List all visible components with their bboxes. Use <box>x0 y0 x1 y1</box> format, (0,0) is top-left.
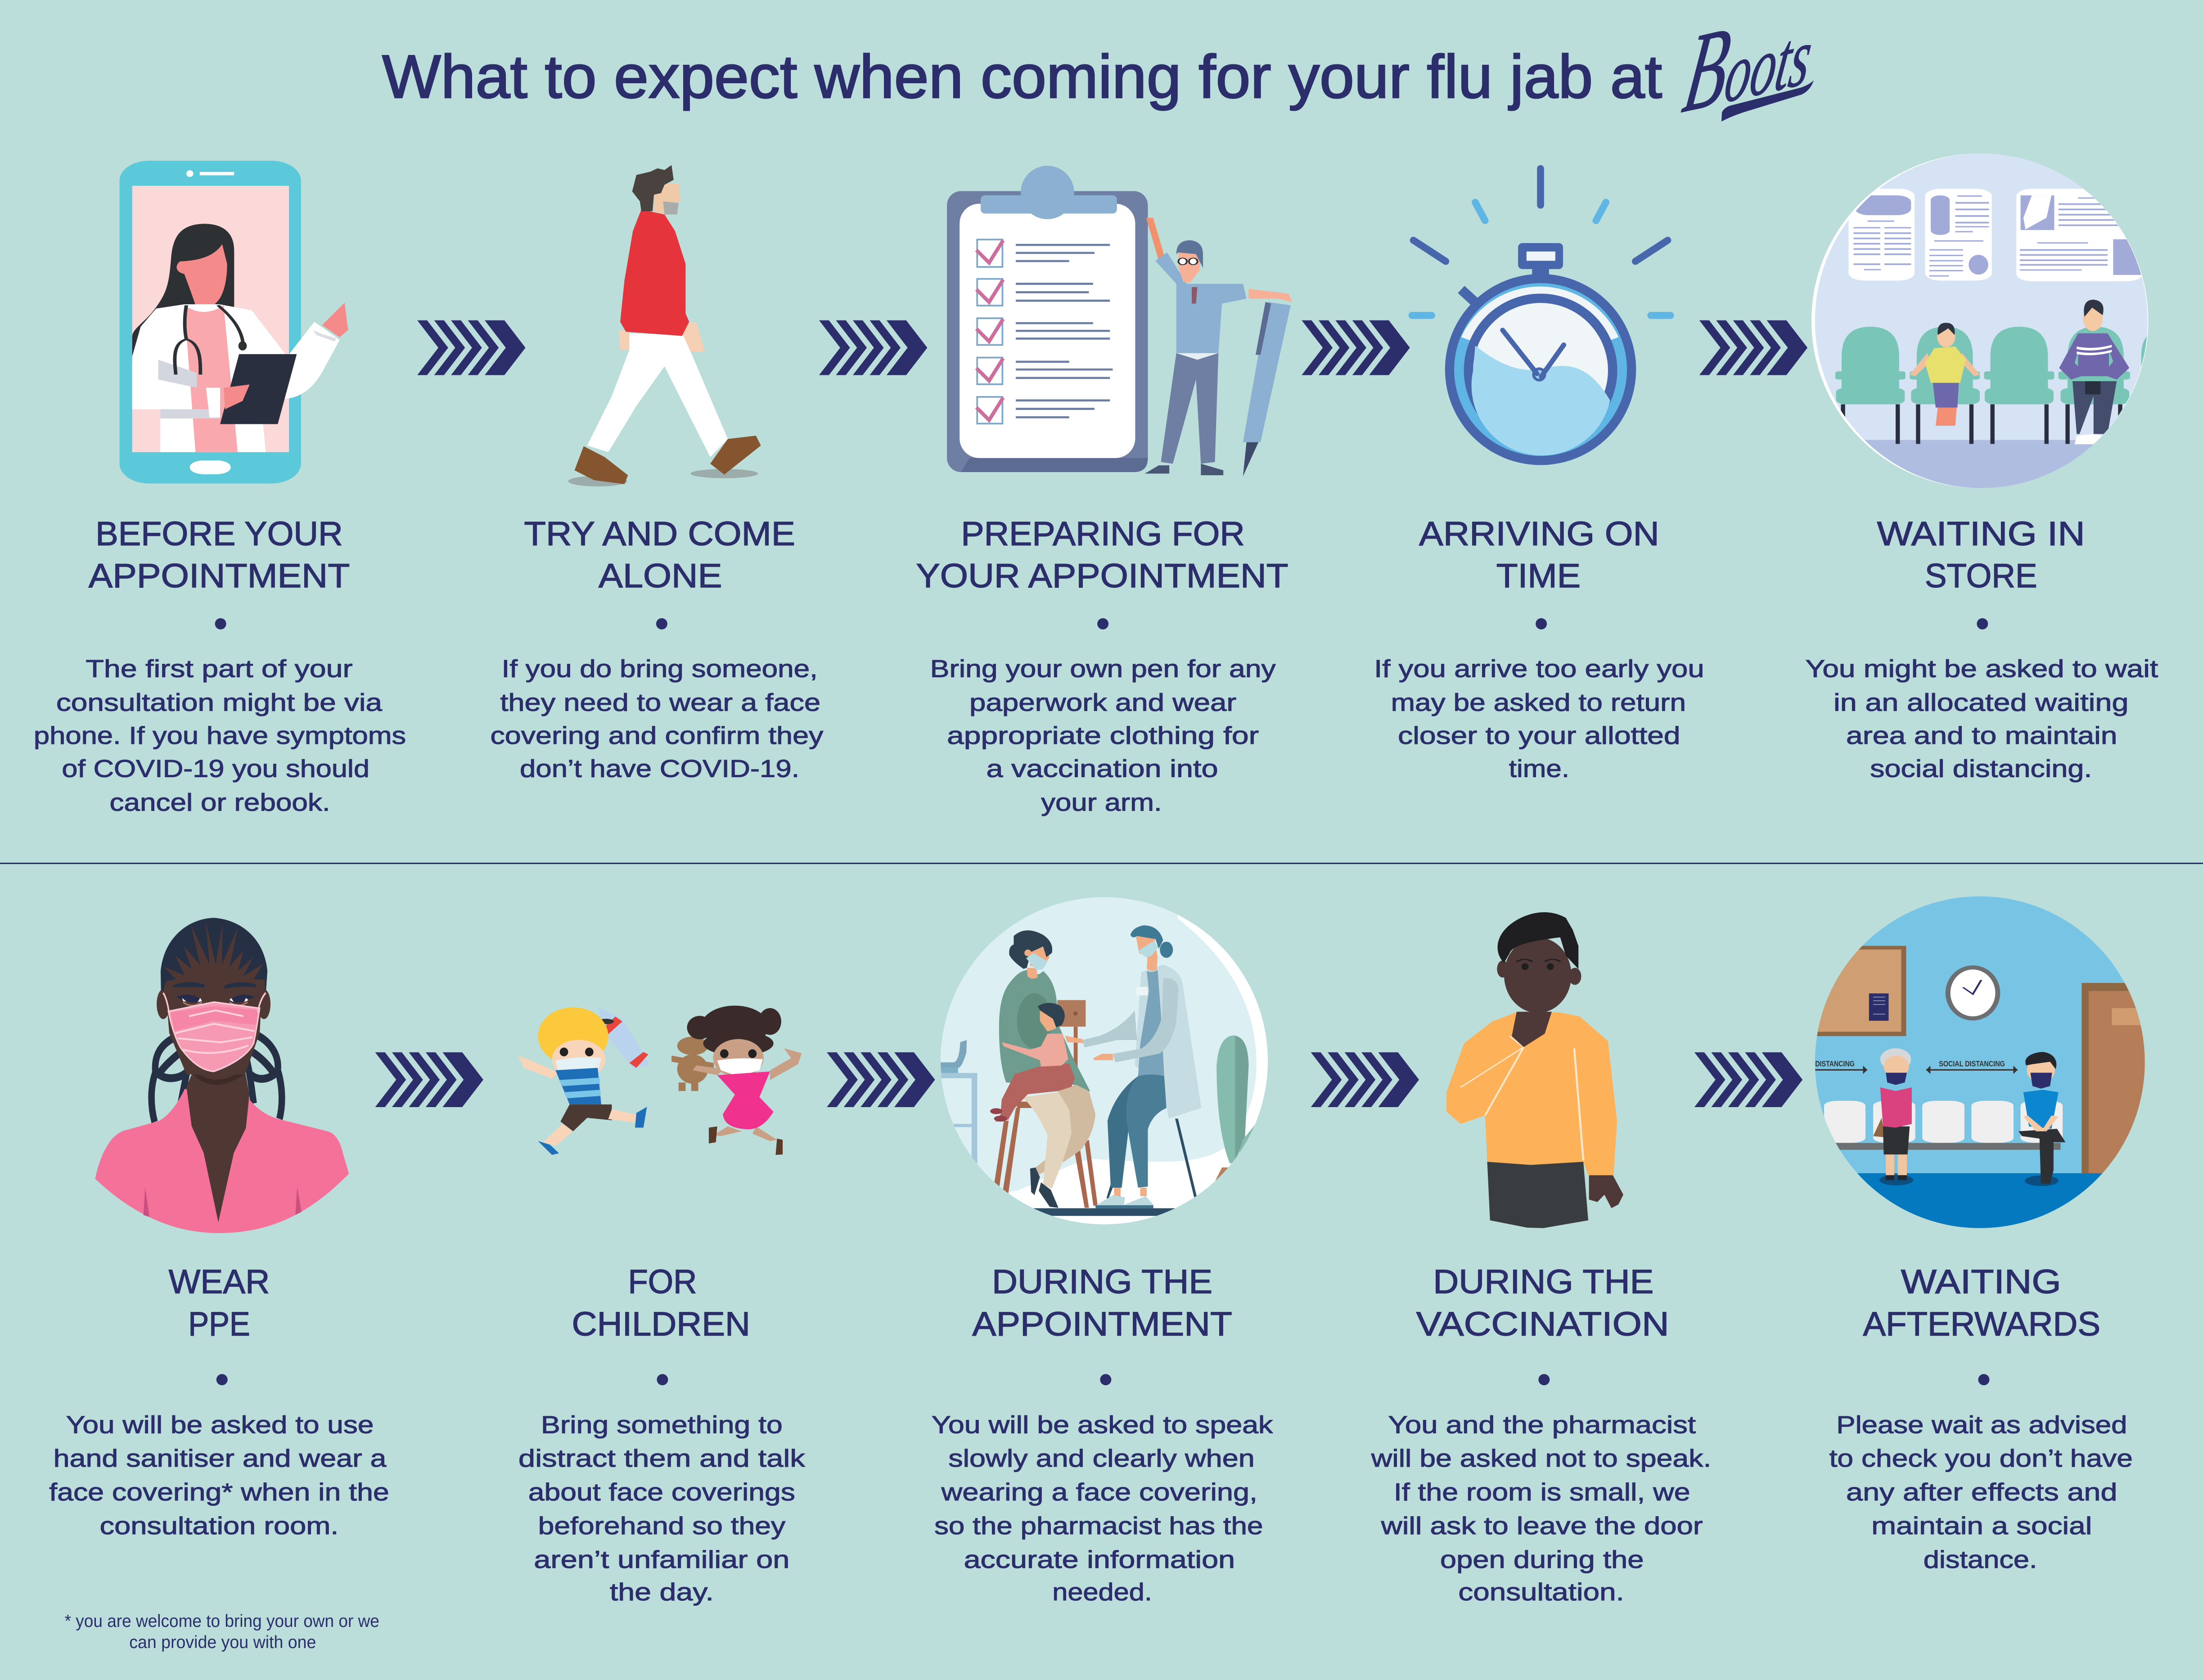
heading: APPOINTMENT <box>89 557 350 595</box>
heading: AFTERWARDS <box>1863 1305 2100 1342</box>
arrow <box>417 320 526 375</box>
body text <box>518 1411 806 1606</box>
panel: arriving on time <box>1374 169 1704 782</box>
heading: DURING THE <box>992 1263 1212 1301</box>
footnote <box>65 1612 379 1652</box>
heading <box>169 1263 270 1342</box>
body text <box>1371 1411 1711 1606</box>
body text: consultation might be via <box>56 689 383 716</box>
arrow <box>827 1052 935 1107</box>
footnote: can provide you with one <box>129 1633 316 1652</box>
heading <box>524 514 795 595</box>
body text <box>1806 655 2158 782</box>
panel: wear PPE <box>49 918 389 1652</box>
body text: You might be asked to wait <box>1806 655 2158 683</box>
label: distancing signs <box>1815 1059 2018 1074</box>
heading: STORE <box>1925 557 2037 595</box>
icon: walking man <box>568 165 761 486</box>
heading: TIME <box>1496 557 1581 595</box>
body text: so the pharmacist has the <box>934 1512 1263 1540</box>
logo: Boots: Boots <box>1676 0 1822 137</box>
heading: CHILDREN <box>572 1305 750 1342</box>
heading: YOUR APPOINTMENT <box>916 557 1288 595</box>
body text: If the room is small, we <box>1394 1478 1690 1506</box>
icon: stopwatch <box>1412 169 1671 465</box>
heading <box>916 514 1288 595</box>
body text: will be asked not to speak. <box>1371 1445 1711 1472</box>
panel: during the vaccination <box>1371 912 1711 1606</box>
heading <box>572 1263 750 1342</box>
body text <box>1829 1411 2133 1573</box>
heading <box>89 514 350 595</box>
body text: Bring something to <box>541 1411 783 1438</box>
body text: distance. <box>1924 1546 2037 1573</box>
body text <box>491 655 824 782</box>
body text: You and the pharmacist <box>1388 1411 1696 1438</box>
heading: WEAR <box>169 1263 270 1301</box>
arrow <box>819 320 927 375</box>
body text: area and to maintain <box>1846 722 2117 749</box>
body text: slowly and clearly when <box>948 1445 1255 1472</box>
body text: distract them and talk <box>518 1445 806 1472</box>
body text: will ask to leave the door <box>1381 1512 1703 1540</box>
heading <box>972 1263 1232 1342</box>
body text: You will be asked to speak <box>932 1411 1273 1438</box>
arrow <box>375 1052 483 1107</box>
heading <box>1863 1263 2100 1342</box>
title: What to expect when coming for your flu jab at <box>382 42 1662 111</box>
heading: WAITING IN <box>1877 514 2085 552</box>
body text: they need to wear a face <box>500 689 820 716</box>
body text: a vaccination into <box>987 755 1218 782</box>
body text: beforehand so they <box>538 1512 786 1540</box>
icon: man in yellow jumper <box>1446 912 1623 1228</box>
body text: hand sanitiser and wear a <box>54 1445 387 1472</box>
heading: PPE <box>188 1305 250 1342</box>
arrow <box>1302 320 1410 375</box>
body text: The first part of your <box>86 655 353 683</box>
body text: If you do bring someone, <box>501 655 818 683</box>
body text: may be asked to return <box>1391 689 1686 716</box>
panel: try and come alone <box>491 165 824 782</box>
panel: preparing for your appointment <box>916 166 1292 816</box>
arrow <box>1694 1052 1802 1107</box>
body text: wearing a face covering, <box>941 1478 1257 1506</box>
body text <box>932 1411 1273 1606</box>
panel: waiting afterwards <box>1815 896 2145 1569</box>
icon: phone with doctor <box>120 161 348 483</box>
heading: BEFORE YOUR <box>95 514 343 552</box>
body text: paperwork and wear <box>969 689 1236 716</box>
body text: Please wait as advised <box>1836 1411 2127 1438</box>
body text: in an allocated waiting <box>1834 689 2129 716</box>
icon: woman in mask <box>95 918 349 1233</box>
body text: time. <box>1509 755 1569 782</box>
body text: phone. If you have symptoms <box>34 722 406 749</box>
heading <box>1416 1263 1669 1342</box>
body text: cancel or rebook. <box>110 788 330 816</box>
body text: face covering* when in the <box>49 1478 389 1506</box>
body text: appropriate clothing for <box>947 722 1259 749</box>
body text <box>1374 655 1704 782</box>
heading: ARRIVING ON <box>1419 514 1659 552</box>
heading: PREPARING FOR <box>961 514 1245 552</box>
body text <box>34 655 406 816</box>
body text <box>930 655 1276 816</box>
label: distancing signs: SOCIAL DISTANCING <box>1939 1059 2005 1068</box>
heading: TRY AND COME <box>524 514 795 552</box>
body text: don’t have COVID-19. <box>520 755 799 782</box>
body text: consultation. <box>1458 1578 1624 1606</box>
body text: You will be asked to use <box>66 1411 374 1438</box>
body text: accurate information <box>964 1546 1235 1573</box>
heading <box>1419 514 1659 595</box>
footnote: * you are welcome to bring your own or we <box>65 1612 379 1631</box>
body text: maintain a social <box>1871 1512 2092 1540</box>
heading: APPOINTMENT <box>972 1305 1232 1342</box>
icon: children in masks <box>518 1006 802 1155</box>
arrow <box>1699 320 1807 375</box>
body text: If you arrive too early you <box>1374 655 1704 683</box>
icon: waiting room <box>1811 153 2149 488</box>
body text: Bring your own pen for any <box>930 655 1276 683</box>
title <box>382 0 1822 137</box>
body text: covering and confirm they <box>491 722 824 749</box>
body text: aren’t unfamiliar on <box>534 1546 789 1573</box>
panel: before your appointment <box>34 161 406 816</box>
body text: needed. <box>1052 1578 1152 1606</box>
icon: clipboard with man <box>947 166 1292 476</box>
body text: consultation room. <box>100 1512 338 1540</box>
body text: the day. <box>610 1578 714 1606</box>
arrow <box>1311 1052 1419 1107</box>
label: distancing signs: DISTANCING <box>1815 1059 1855 1068</box>
body text: your arm. <box>1041 788 1162 816</box>
heading: FOR <box>628 1263 697 1301</box>
body text: open during the <box>1440 1546 1644 1573</box>
body text: about face coverings <box>528 1478 795 1506</box>
heading: DURING THE <box>1433 1263 1653 1301</box>
body text <box>49 1411 389 1540</box>
panel: during the appointment <box>932 896 1273 1606</box>
body text: social distancing. <box>1870 755 2092 782</box>
body text: to check you don’t have <box>1829 1445 2133 1472</box>
body text: closer to your allotted <box>1398 722 1680 749</box>
heading: ALONE <box>599 557 722 595</box>
body text: any after effects and <box>1846 1478 2117 1506</box>
heading: WAITING <box>1901 1263 2061 1301</box>
panel: for children <box>518 1006 806 1606</box>
heading: VACCINATION <box>1416 1305 1669 1342</box>
icon: consultation scene <box>938 896 1272 1227</box>
body text: of COVID-19 you should <box>62 755 369 782</box>
panel: waiting in store <box>1804 149 2169 782</box>
heading <box>1877 514 2085 595</box>
icon: social distancing room <box>1804 892 2169 1232</box>
